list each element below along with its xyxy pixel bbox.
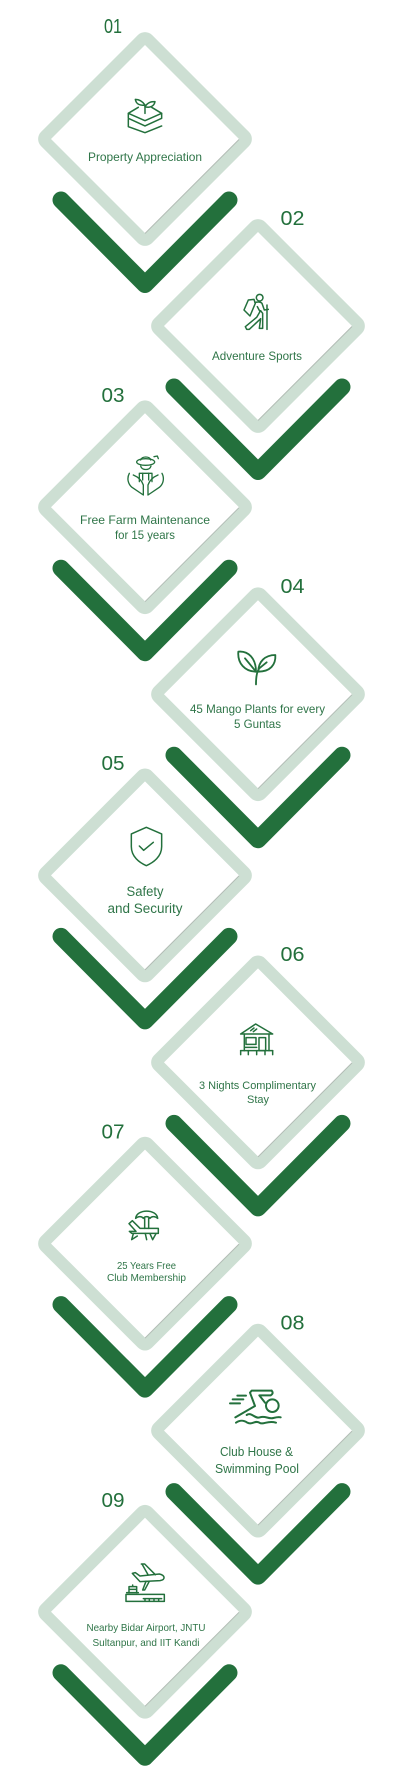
diamond frame 07 [34,1133,256,1355]
label: 25 Years Free Club Membership: Club Membership [107,1272,186,1284]
panel: item 03 Free Farm Maintenance [34,385,256,653]
diamond frame 04 [147,583,369,805]
panel: item 02 Adventure Sports [147,208,369,472]
icon: hiker [244,294,268,329]
label: Club House and Swimming Pool: Club House & [220,1444,293,1459]
chevron 07 [61,1305,229,1389]
diamond frame 05 [34,764,256,986]
panel: item 04 Mango Plants [147,576,369,840]
icon: sun lounger and umbrella [129,1211,158,1240]
label: Club House and Swimming Pool [215,1444,299,1476]
label: 3 Nights Complimentary Stay [199,1080,316,1106]
icon: seedling on layers [128,99,162,133]
diamond frame 02 [147,215,369,437]
number 08: 08 [280,1312,304,1334]
label: Safety and Security: and Security [108,901,183,916]
panel: item 07 Club Membership [34,1122,256,1389]
label: Property Appreciation: Property Appreciation [88,150,202,164]
label: 25 Years Free Club Membership: 25 Years Free [117,1260,176,1272]
chevron 03 [61,568,229,653]
label: Free Farm Maintenance for 15 years [80,513,210,542]
panel: item 09 Nearby Airport [34,1490,256,1757]
chevron 09 [61,1673,229,1757]
icon: plant sprout [238,652,275,684]
label: Nearby Bidar Airport, JNTU Sultanpur, and IIT Kandi [86,1622,206,1649]
label: Free Farm Maintenance for 15 years: Free Farm Maintenance [80,513,210,527]
panel: item 06 Complimentary Stay [147,944,369,1208]
chevron 05 [61,936,229,1021]
number 09: 09 [102,1490,124,1512]
chevron 02 [174,387,342,472]
number 02: 02 [280,208,304,230]
number 03: 03 [102,385,124,407]
icon: swimmer [230,1391,281,1423]
diamond frame 06 [147,951,369,1173]
number 04: 04 [280,576,304,598]
label: Safety and Security: Safety [126,884,164,899]
label: 45 Mango Plants for every 5 Guntas: 45 Mango Plants for every [190,702,325,716]
icon: farmer with hands [128,456,163,495]
label: Adventure Sports: Adventure Sports [212,349,302,363]
label: 45 Mango Plants for every 5 Guntas: 5 Guntas [234,717,281,731]
panel: item 01 Property Appreciation [34,16,256,284]
icon: house [241,1024,273,1055]
panel: item 08 Club House and Swimming Pool [147,1312,369,1576]
chevron 08 [174,1492,342,1576]
label: Nearby Bidar Airport, JNTU Sultanpur, and IIT Kandi: Sultanpur, and IIT Kandi [92,1637,200,1649]
label: 3 Nights Complimentary Stay: 3 Nights Complimentary [199,1080,316,1092]
label: 25 Years Free Club Membership [107,1260,186,1284]
diamond frame 03 [34,396,256,618]
number 01: 01 [104,16,122,38]
label: 45 Mango Plants for every 5 Guntas [190,702,325,731]
label: Free Farm Maintenance for 15 years: for 15 years [115,528,175,542]
label: Nearby Bidar Airport, JNTU Sultanpur, and IIT Kandi: Nearby Bidar Airport, JNTU [86,1622,206,1634]
icon: airplane and terminal [126,1564,164,1601]
chevron 01 [61,200,229,284]
diamond frame 01 [34,28,256,250]
diamond frame 08 [147,1320,369,1542]
label: 3 Nights Complimentary Stay: Stay [247,1094,269,1106]
label: Club House and Swimming Pool: Swimming Pool [215,1461,299,1476]
number 06: 06 [280,944,304,966]
label: Safety and Security [108,884,183,916]
number 05: 05 [102,753,124,775]
icon: shield with check [131,827,162,866]
chevron 06 [174,1123,342,1208]
number 07: 07 [102,1122,124,1144]
panel: item 05 Safety and Security [34,753,256,1021]
diamond frame 09 [34,1501,256,1723]
chevron 04 [174,755,342,840]
